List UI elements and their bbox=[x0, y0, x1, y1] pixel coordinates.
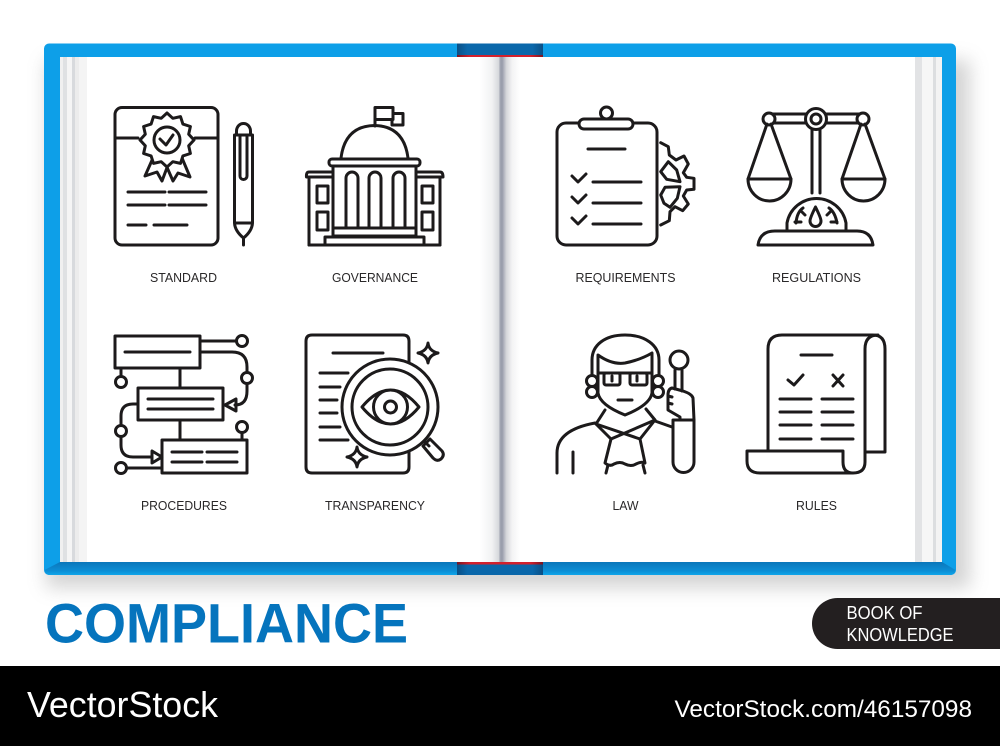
title: COMPLIANCE bbox=[45, 592, 408, 654]
label: procedures: PROCEDURES bbox=[141, 498, 227, 513]
label: requirements: REQUIREMENTS bbox=[576, 270, 676, 285]
icon: pen bbox=[234, 124, 252, 245]
book drop shadow bbox=[46, 60, 970, 588]
icon: transparency bbox=[306, 335, 443, 473]
icon: standard bbox=[115, 108, 218, 245]
label: transparency: TRANSPARENCY bbox=[325, 498, 425, 513]
badge: book of knowledge: KNOWLEDGE bbox=[846, 625, 954, 645]
label: governance: GOVERNANCE bbox=[332, 270, 418, 285]
footer bar: VectorStock bbox=[27, 684, 219, 725]
icon: governance bbox=[306, 108, 443, 245]
icon: regulations bbox=[748, 108, 885, 245]
bottom ribbon bbox=[457, 562, 543, 575]
icon: law bbox=[557, 335, 694, 473]
book cover bbox=[44, 44, 956, 575]
left and right pages bbox=[60, 57, 942, 562]
icon: rules bbox=[747, 335, 885, 473]
label: regulations: REGULATIONS bbox=[772, 270, 861, 285]
label: law: LAW bbox=[612, 498, 639, 513]
label: standard: STANDARD bbox=[150, 270, 217, 285]
icon: requirements bbox=[557, 107, 694, 245]
footer bar bbox=[0, 666, 1000, 746]
footer bar: VectorStock.com/46157098 bbox=[674, 696, 972, 723]
top ribbon bbox=[457, 44, 543, 57]
label: rules: RULES bbox=[796, 498, 837, 513]
icon: procedures bbox=[115, 336, 252, 474]
badge: book of knowledge: BOOK OF bbox=[846, 603, 922, 623]
badge: book of knowledge bbox=[812, 598, 1000, 649]
open book bbox=[44, 44, 956, 575]
